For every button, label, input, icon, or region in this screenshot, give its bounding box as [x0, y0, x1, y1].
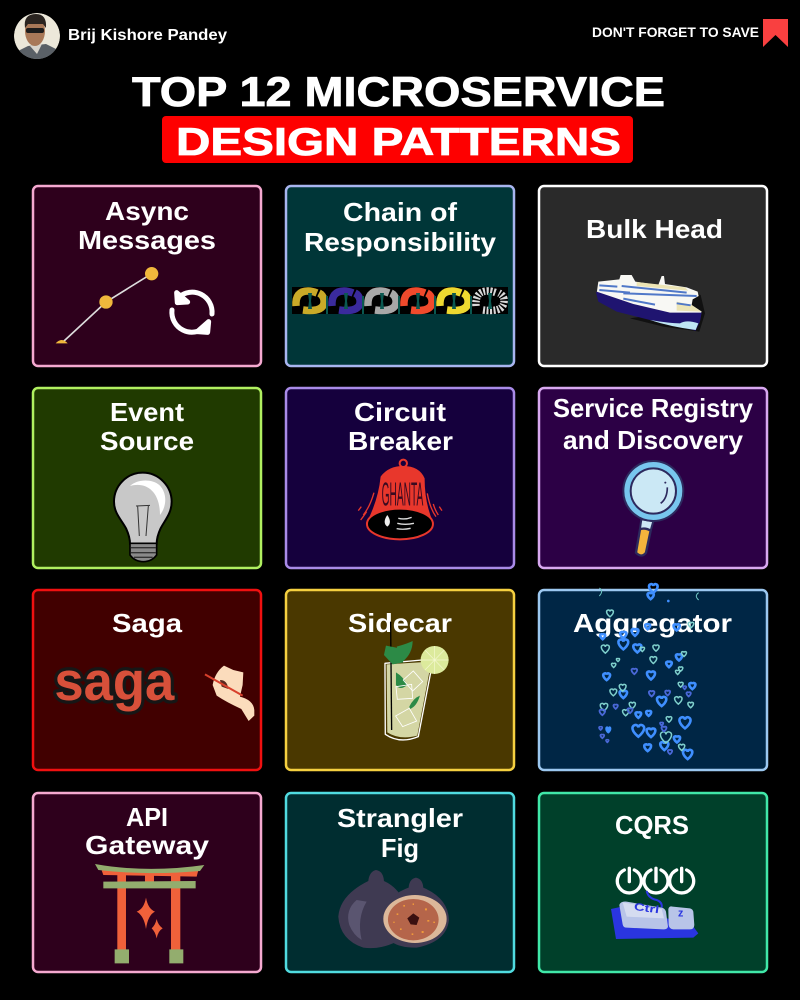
icon: mojito glass — [384, 622, 449, 740]
icon: torii gate — [95, 864, 204, 963]
heading: chain of responsibility: Chain of — [343, 197, 457, 227]
heading: async messages: Async — [105, 196, 189, 226]
icon: light bulb — [114, 473, 172, 562]
icon: ctrl z keyboard keys: z — [678, 907, 683, 919]
heading: event source — [100, 397, 194, 456]
panel: chain of responsibility — [286, 186, 514, 366]
panel: circuit breaker — [286, 388, 514, 568]
heading: chain of responsibility — [304, 197, 497, 257]
heading: event source: Event — [110, 397, 184, 427]
author avatar — [14, 13, 60, 59]
heading: service registry and discovery: Service Registry — [553, 393, 754, 423]
heading: service registry and discovery: and Discovery — [563, 425, 744, 455]
panel: cqrs — [539, 793, 767, 972]
panel: aggregator — [539, 584, 767, 770]
icon: hand with pencil — [205, 666, 254, 721]
icon: chain links — [292, 287, 508, 314]
icon: cruise ship — [596, 275, 705, 332]
panel: event source — [33, 388, 261, 568]
heading: bulk head: Bulk Head — [586, 214, 723, 244]
panel: sidecar — [286, 590, 514, 770]
heading: sidecar: Sidecar — [348, 608, 452, 638]
title — [132, 68, 665, 164]
icon: ctrl z keyboard keys — [611, 891, 698, 939]
heading: strangler fig: Fig — [381, 833, 419, 863]
panel: circuit breaker: GHANTA — [382, 476, 424, 513]
icon: magnifying glass — [623, 461, 683, 555]
title: TOP 12 MICROSERVICE — [132, 68, 665, 115]
title: DESIGN PATTERNS — [176, 121, 621, 164]
panel: async messages — [33, 186, 261, 366]
icon: figs — [338, 870, 449, 948]
panel: bulk head — [539, 186, 767, 366]
heading: cqrs: CQRS — [615, 810, 689, 840]
heading: aggregator: Aggregator — [573, 608, 732, 638]
icon: floating hearts — [599, 584, 699, 759]
heading: api gateway: Gateway — [85, 830, 210, 860]
heading: async messages — [78, 196, 216, 255]
icon: bookmark — [763, 19, 788, 47]
save prompt: DON'T FORGET TO SAVE — [592, 24, 759, 40]
heading: async messages: Messages — [78, 225, 216, 255]
heading: circuit breaker: Breaker — [348, 426, 453, 456]
icon: sync arrows — [172, 292, 212, 332]
heading: saga: Saga — [112, 608, 183, 638]
heading: api gateway: API — [126, 802, 168, 832]
author name: Brij Kishore Pandey — [68, 27, 227, 44]
panel: saga — [33, 590, 261, 770]
icon: ctrl z keyboard keys: Ctrl — [633, 901, 660, 916]
panel: service registry and discovery — [539, 388, 767, 568]
heading: api gateway — [85, 802, 210, 860]
heading: circuit breaker: Circuit — [354, 397, 446, 427]
panel: strangler fig — [286, 793, 514, 972]
icon: message line with dots — [56, 267, 158, 343]
heading: chain of responsibility: Responsibility — [304, 227, 497, 257]
heading: event source: Source — [100, 426, 194, 456]
icon: bell — [358, 460, 442, 539]
icon: power symbols — [617, 868, 694, 893]
heading: service registry and discovery — [553, 393, 754, 455]
heading: strangler fig: Strangler — [337, 803, 463, 833]
heading: strangler fig — [337, 803, 463, 863]
heading: circuit breaker — [348, 397, 453, 456]
icon: saga word art: saga — [54, 650, 175, 712]
panel: api gateway — [33, 793, 261, 972]
